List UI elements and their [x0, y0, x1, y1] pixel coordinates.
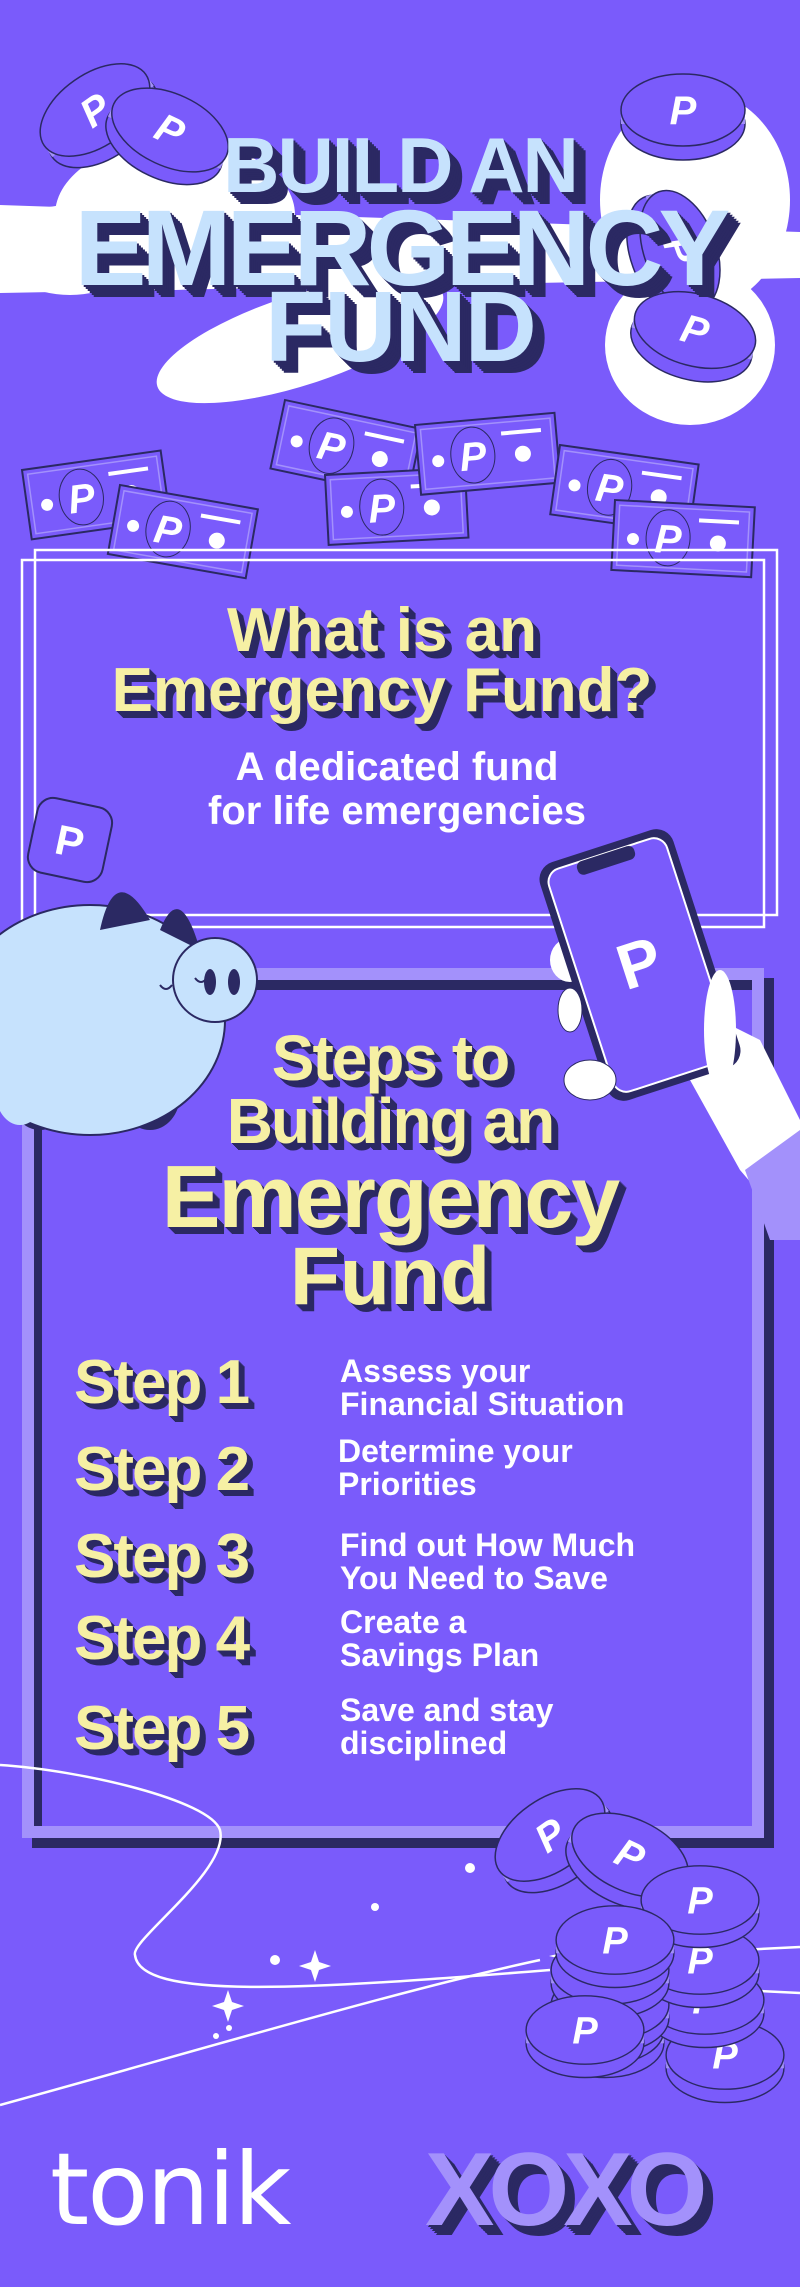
title: [74, 121, 741, 383]
step 5: Step 5: [74, 1694, 248, 1763]
icon: phone in hand: [535, 824, 800, 1240]
step 3: [74, 1522, 635, 1596]
step 1: Assess your: [340, 1353, 530, 1389]
panel frame: steps: [22, 968, 774, 1848]
heading: steps to building an emergency fund: [162, 1022, 627, 1322]
heading: what is an emergency fund: What is an: [227, 596, 537, 665]
step 2: [74, 1433, 573, 1509]
icon: piggy bank: P: [51, 816, 88, 867]
step 1: Step 1: [74, 1348, 248, 1417]
icon: coin stacks: [526, 1866, 784, 2102]
step 1: [74, 1348, 624, 1422]
steps list: [74, 1348, 635, 1768]
step 3: Step 3: [74, 1522, 248, 1591]
icon: phone in hand: P: [608, 922, 671, 1004]
step 3: You Need to Save: [340, 1560, 608, 1596]
panel frame: what is: [22, 550, 777, 927]
icon: coins right: [612, 179, 764, 394]
step 5: [74, 1692, 554, 1768]
text: definition: [208, 745, 586, 833]
text: definition: for life emergencies: [208, 789, 586, 833]
logo: tonik: tonik: [50, 2131, 289, 2248]
icon: coins near panel bottom: [479, 1770, 701, 1927]
step 5: Save and stay: [340, 1692, 553, 1728]
step 5: disciplined: [340, 1725, 507, 1761]
step 4: Step 4: [74, 1604, 248, 1673]
title: BUILD AN: [223, 121, 577, 209]
heading: what is an emergency fund: Emergency Fund?: [112, 656, 652, 725]
step 4: [74, 1604, 539, 1678]
icon: money bills: [22, 400, 755, 578]
step 3: Find out How Much: [340, 1527, 635, 1563]
logo: XOXO: XOXO: [425, 2132, 702, 2248]
icon: piggy bank: [0, 795, 257, 1135]
heading: steps to building an emergency fund: Building an: [227, 1085, 553, 1157]
decorative lines and sparkles: [0, 1765, 800, 2105]
text: definition: A dedicated fund: [236, 745, 558, 789]
heading: steps to building an emergency fund: Steps to: [272, 1022, 508, 1094]
title: EMERGENCY: [74, 187, 726, 308]
step 4: Savings Plan: [340, 1637, 539, 1673]
clouds behind title: [0, 90, 800, 429]
step 2: Determine your: [338, 1433, 573, 1469]
step 1: Financial Situation: [340, 1386, 624, 1422]
icon: coin top right: [621, 74, 745, 160]
step 2: Step 2: [74, 1435, 248, 1504]
step 4: Create a: [340, 1604, 466, 1640]
heading: steps to building an emergency fund: Fund: [290, 1231, 490, 1322]
title: FUND: [265, 271, 535, 383]
heading: steps to building an emergency fund: Emergency: [162, 1147, 618, 1246]
step 2: Priorities: [338, 1466, 477, 1502]
heading: what is an emergency fund: [112, 596, 656, 833]
icon: coins top left: [24, 45, 241, 202]
